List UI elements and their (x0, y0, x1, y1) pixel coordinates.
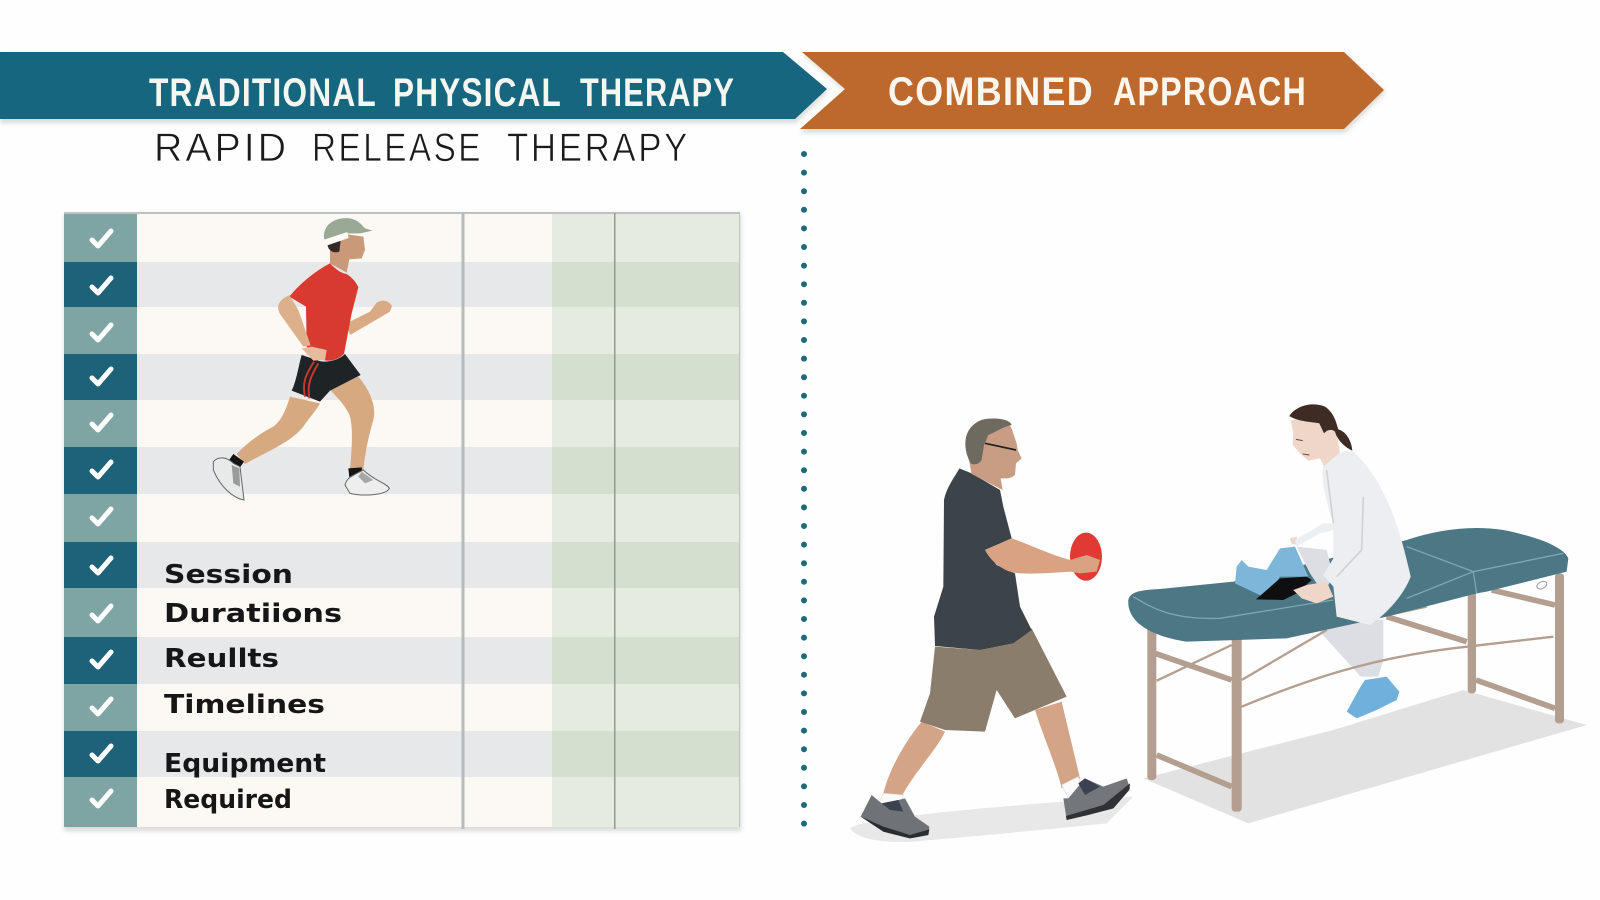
head (967, 419, 1022, 490)
therapist (1235, 404, 1411, 625)
illustration: massage table with therapist (1128, 404, 1587, 823)
row labels: Duratiions (164, 599, 342, 629)
arm (985, 538, 1100, 574)
woman's lower leg and shoe (1320, 617, 1399, 718)
banner: combined approach (800, 52, 1386, 133)
row labels (164, 560, 342, 815)
table top (1128, 528, 1568, 642)
subheading: rapid release therapy: RAPID (154, 126, 289, 170)
banner: combined approach: APPROACH (1113, 70, 1307, 114)
subheading: rapid release therapy (154, 126, 690, 170)
shoes (861, 778, 1130, 838)
row labels: Reullts (164, 644, 279, 674)
row labels: Required (164, 785, 292, 815)
banner: traditional physical therapy: TRADITIONAL (149, 71, 377, 115)
row labels: Session (164, 560, 293, 590)
banner: traditional physical therapy: PHYSICAL (393, 71, 562, 115)
floor shadow (1143, 690, 1587, 823)
banner: combined approach: COMBINED (888, 70, 1094, 114)
shirt (934, 468, 1032, 650)
legs (1035, 702, 1080, 788)
shorts (920, 628, 1067, 732)
illustration: man walking with red ball (850, 419, 1133, 842)
ground shadow (850, 797, 1133, 842)
illustration: runner (213, 218, 392, 500)
banner: traditional physical therapy (0, 52, 828, 123)
check marks column (92, 231, 111, 806)
banner: traditional physical therapy: THERAPY (580, 71, 735, 115)
row labels: Equipment (164, 749, 326, 779)
subheading: rapid release therapy: THERAPY (507, 126, 690, 170)
comparison table (64, 212, 741, 831)
row labels: Timelines (164, 690, 325, 720)
subheading: rapid release therapy: RELEASE (312, 126, 483, 170)
dotted divider (801, 154, 807, 830)
red ball (1070, 533, 1102, 581)
table frame (1147, 573, 1564, 812)
